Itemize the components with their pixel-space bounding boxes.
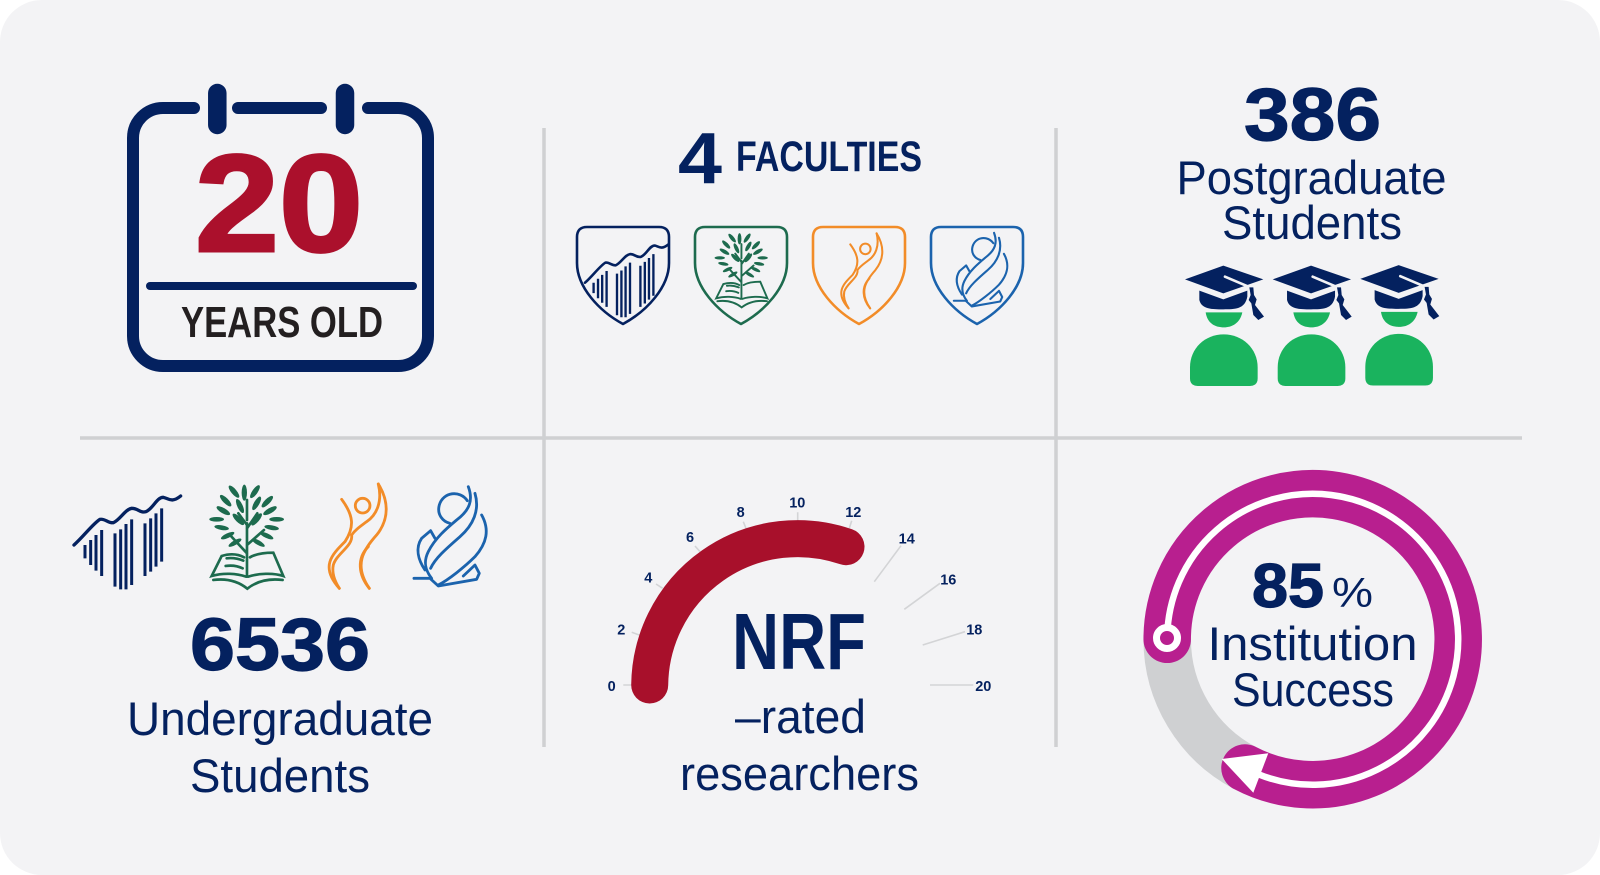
label: rated researchers: –rated <box>735 690 866 743</box>
chart: gauge: 8 <box>737 505 745 521</box>
chart: gauge: 18 <box>966 622 982 638</box>
icon: humanities shield <box>813 227 905 324</box>
number: 20: 20 <box>195 127 363 281</box>
chart: gauge: 12 <box>845 505 861 521</box>
panel: institution success <box>1156 494 1458 793</box>
icon: economic sciences shield <box>577 227 669 324</box>
chart: gauge: 20 <box>975 679 991 695</box>
chart: gauge: 6 <box>686 530 694 546</box>
panel: NRF-rated researchers <box>608 496 991 800</box>
chart: gauge: 14 <box>899 532 915 548</box>
panel: 20 years old calendar <box>133 93 428 366</box>
label: NRF: NRF <box>732 597 866 686</box>
icon: education shield <box>695 227 787 324</box>
label: institution success: Success <box>1232 663 1394 716</box>
chart: gauge: 2 <box>617 622 625 638</box>
icon: calendar frame <box>133 93 428 366</box>
label: rated researchers: researchers <box>680 747 919 800</box>
number: 85% <box>1252 552 1373 621</box>
chart: progress ring <box>1156 494 1458 793</box>
label: institution success: Institution <box>1208 617 1418 670</box>
label: postgraduate students: Postgraduate <box>1176 151 1446 204</box>
label: undergraduate students: Undergraduate <box>127 692 433 745</box>
chart: gauge: 0 <box>608 679 616 695</box>
icon: three graduates <box>1185 265 1439 386</box>
label: undergraduate students: Students <box>190 749 370 802</box>
heading: 4 faculties <box>678 119 922 199</box>
label: years old: YEARS OLD <box>181 298 383 347</box>
label: institution success <box>1208 617 1418 716</box>
number: 85%: % <box>1332 569 1373 616</box>
label: undergraduate students <box>127 692 433 802</box>
label: postgraduate students <box>1176 151 1446 249</box>
panel: 4 faculties <box>577 119 1023 324</box>
heading: 4 faculties: 4 <box>678 119 722 199</box>
icon: theology shield <box>931 227 1023 324</box>
panel: undergraduate students <box>74 484 486 802</box>
heading: 4 faculties: FACULTIES <box>736 133 922 181</box>
icon: faculty emblems row <box>74 484 486 589</box>
panel: postgraduate students <box>1176 73 1446 386</box>
number: 85%: 85 <box>1252 552 1324 621</box>
number: 6536: 6536 <box>190 603 370 686</box>
number: 386: 386 <box>1244 73 1381 156</box>
chart: gauge: 10 <box>789 496 805 512</box>
chart: gauge: 4 <box>644 570 652 586</box>
chart: gauge: 16 <box>940 572 956 588</box>
chart: gauge <box>608 496 991 695</box>
label: rated researchers <box>680 690 919 800</box>
label: postgraduate students: Students <box>1222 196 1402 249</box>
